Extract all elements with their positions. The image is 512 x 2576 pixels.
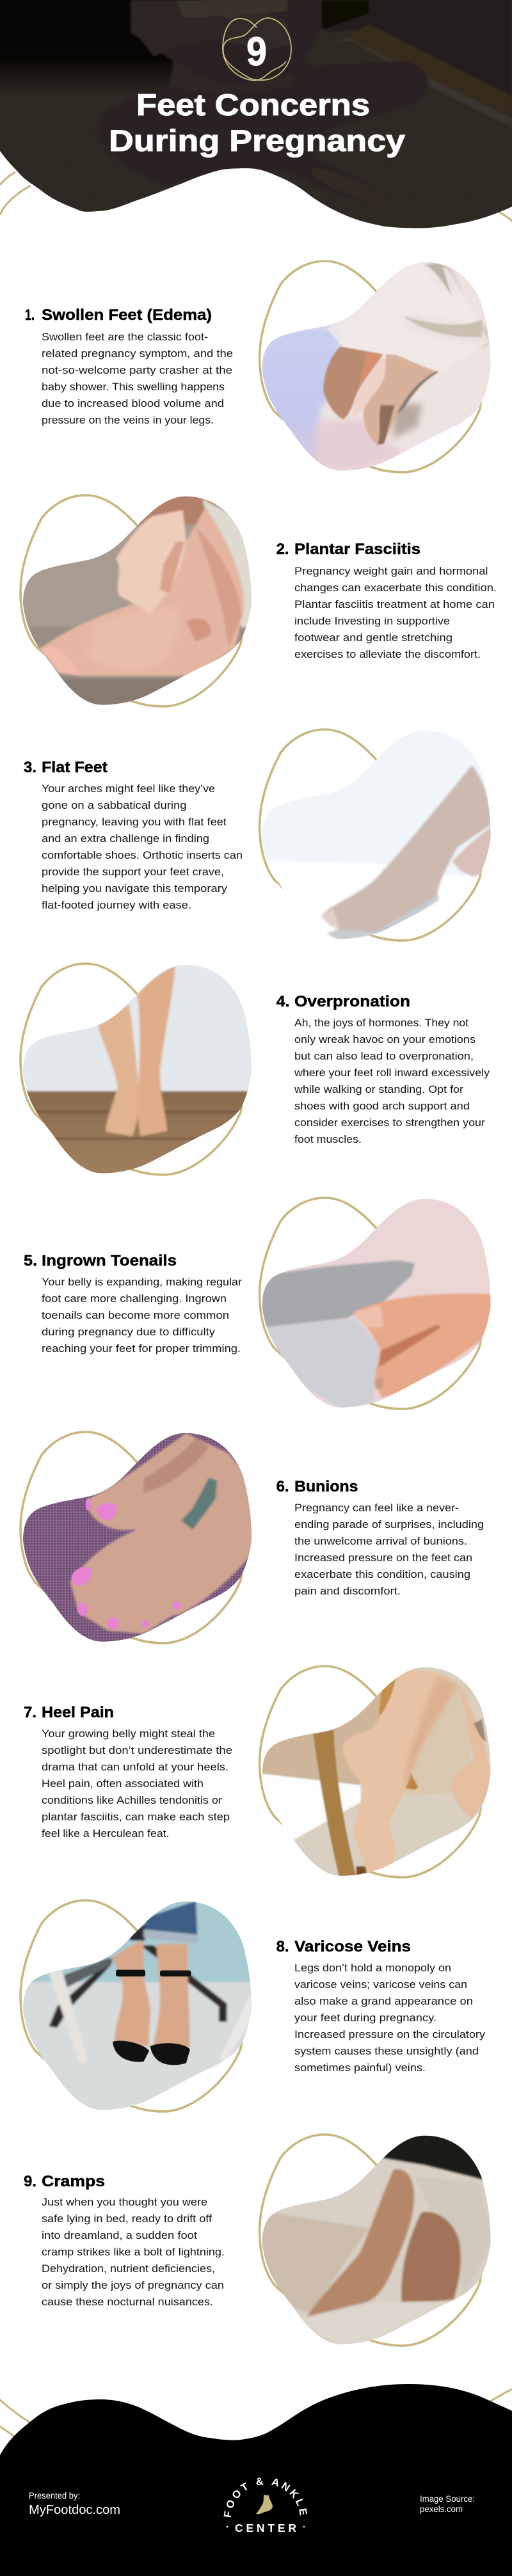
header decorative gold arcs [0, 172, 512, 222]
gold outline [260, 1666, 481, 1877]
body text: toenails can become more common [42, 1310, 229, 1321]
panel: 5 ingrown toenails [24, 1193, 497, 1419]
body text: into dreamland, a sudden foot [42, 2230, 197, 2241]
heading: Varicose Veins [294, 1938, 411, 1955]
heading: Ingrown Toenails [42, 1252, 177, 1269]
body text: Your growing belly might steal the [42, 1728, 215, 1740]
body text [42, 2197, 225, 2308]
gold outline [260, 2135, 481, 2346]
body text: conditions like Achilles tendonitis or [42, 1795, 223, 1806]
heading: 8. [276, 1938, 289, 1955]
body text: also make a grand appearance on [294, 1996, 473, 2007]
body text: reaching your feet for proper trimming. [42, 1343, 241, 1355]
body text: provide the support your feet crave, [42, 866, 224, 878]
footer black wave panel [0, 2384, 512, 2576]
gold outline [260, 729, 481, 941]
body text [294, 1962, 486, 2074]
heading: Flat Feet [42, 759, 108, 776]
body text [42, 331, 233, 426]
body text: sometimes painful) veins. [294, 2062, 426, 2074]
heading: Swollen Feet (Edema) [42, 306, 212, 324]
photo: feet in black sandals and jeans [23, 1902, 252, 2110]
photo: bare feet on bright white floor [262, 731, 491, 939]
header photo: seated pregnant woman on mat [0, 0, 512, 239]
body text: plantar fasciitis, can make each step [42, 1811, 230, 1823]
gold outline [20, 1432, 242, 1643]
body text: flat-footed journey with ease. [42, 900, 191, 911]
photo: raised heels beside wooden chair leg [256, 1664, 499, 1881]
photo: feet under rumpled sheets in bed [262, 2136, 491, 2344]
heading: 2. [276, 541, 289, 558]
footer: presented by: Presented by: [29, 2491, 80, 2500]
title [109, 88, 405, 157]
footer: image source: pexels.com [420, 2504, 463, 2514]
body text: your feet during pregnancy. [294, 2012, 436, 2024]
title: Feet Concerns [136, 88, 370, 122]
heading: Bunions [294, 1478, 358, 1495]
number badge: gold heart ring with 9: 9 [246, 29, 267, 74]
body text: where your feet roll inward excessively [294, 1067, 490, 1079]
heading: 4. [276, 993, 290, 1010]
body text: footwear and gentle stretching [294, 632, 452, 644]
body text: cause these nocturnal nuisances. [42, 2296, 213, 2308]
body text: system causes these unsightly (and [294, 2046, 479, 2057]
footer: presented by [29, 2491, 120, 2517]
body text: shoes with good arch support and [294, 1101, 470, 1112]
logo: foot and ankle center: FOOT & ANKLE [224, 2477, 307, 2517]
body text: consider exercises to strengthen your [294, 1117, 486, 1129]
body text: drama that can unfold at your heels. [42, 1761, 228, 1773]
icon: gold foot [256, 2495, 273, 2514]
photo: legs standing on wood floor [23, 965, 252, 1173]
body text: cramp strikes like a bolt of lightning. [42, 2246, 225, 2258]
body text: Pregnancy weight gain and hormonal [294, 566, 488, 577]
body text: the unwelcome arrival of bunions. [294, 1536, 467, 1547]
body text: baby shower. This swelling happens [42, 381, 225, 393]
body text: while walking or standing. Opt for [294, 1084, 464, 1095]
footer decorative gold arcs [0, 2389, 512, 2439]
body text: pregnancy, leaving you with flat feet [42, 816, 227, 828]
footer: image source [420, 2494, 475, 2514]
panel: 6 bunions [13, 1429, 484, 1649]
footer: presented by: MyFootdoc.com [29, 2503, 120, 2517]
heading: 9. [24, 2173, 36, 2190]
body text: Swollen feet are the classic foot- [42, 331, 208, 343]
panel: 4 overpronation [13, 958, 490, 1183]
body text: Legs don’t hold a monopoly on [294, 1962, 451, 1974]
body text: helping you navigate this temporary [42, 883, 228, 894]
body text: Your belly is expanding, making regular [42, 1276, 243, 1288]
body text: varicose veins; varicose veins can [294, 1979, 467, 1991]
photo: foot with pink nails on purple glitter [23, 1433, 252, 1642]
body text: ending parade of surprises, including [294, 1519, 484, 1530]
body text: not-so-welcome party crasher at the [42, 365, 232, 376]
body text: foot care more challenging. Ingrown [42, 1293, 227, 1305]
body text: related pregnancy symptom, and the [42, 348, 233, 360]
body text: and an extra challenge in finding [42, 833, 209, 845]
heading: 6. [276, 1478, 289, 1495]
panel: 3 flat feet [24, 722, 497, 949]
gold outline [260, 261, 481, 472]
body text: but can also lead to overpronation, [294, 1051, 474, 1062]
body text: Ah, the joys of hormones. They not [294, 1017, 468, 1029]
heading: Heel Pain [42, 1704, 114, 1721]
heading: Cramps [42, 2173, 105, 2190]
body text: exacerbate this condition, causing [294, 1569, 470, 1580]
body text: Increased pressure on the circulatory [294, 2029, 486, 2040]
body text [294, 566, 497, 660]
body text: foot muscles. [294, 1134, 362, 1145]
heading: Overpronation [294, 993, 410, 1010]
body text: comfortable shoes. Orthotic inserts can [42, 850, 243, 861]
panel: 1 swollen feet [25, 256, 499, 475]
gold outline [260, 1198, 481, 1409]
gold outline [20, 1900, 242, 2111]
body text: Dehydration, nutrient deficiencies, [42, 2263, 215, 2275]
body text [42, 1276, 243, 1355]
heading: 1. [25, 306, 35, 324]
body text [294, 1502, 484, 1597]
number badge: gold heart ring with 9 [223, 18, 291, 81]
body text: pain and discomfort. [294, 1586, 401, 1597]
body text: Increased pressure on the feet can [294, 1552, 472, 1564]
heading: Plantar Fasciitis [294, 541, 420, 558]
body text: safe lying in bed, ready to drift off [42, 2213, 212, 2225]
body text: Heel pain, often associated with [42, 1778, 204, 1790]
body text: gone on a sabbatical during [42, 800, 187, 811]
body text: feel like a Herculean feat. [42, 1828, 169, 1840]
logo: foot and ankle center: CENTER [235, 2522, 296, 2534]
body text: changes can exacerbate this condition. [294, 582, 497, 594]
body text: include Investing in supportive [294, 616, 450, 627]
body text: due to increased blood volume and [42, 398, 224, 409]
title: During Pregnancy [109, 123, 405, 157]
panel: 7 heel pain [24, 1664, 499, 1881]
gold outline [20, 495, 242, 706]
photo: feet on white and lavender bed sheets [262, 262, 490, 471]
panel: 8 varicose veins [13, 1896, 486, 2117]
heading: 7. [24, 1704, 36, 1721]
panel: 2 plantar fasciitis [13, 493, 497, 710]
body text [42, 1728, 232, 1840]
body text: during pregnancy due to difficulty [42, 1326, 216, 1338]
heading: 3. [24, 759, 36, 776]
footer: image source: Image Source: [420, 2494, 475, 2504]
body text: exercises to alleviate the discomfort. [294, 649, 481, 660]
body text [294, 1017, 490, 1145]
photo: hand touching swollen ankle [23, 497, 252, 705]
body text [42, 783, 243, 911]
body text: pressure on the veins in your legs. [42, 415, 214, 426]
panel: 9 cramps [24, 2128, 497, 2351]
heading: 5. [24, 1252, 37, 1269]
body text: only wreak havoc on your emotions [294, 1034, 476, 1046]
body text: Pregnancy can feel like a never- [294, 1502, 459, 1514]
body text: spotlight but don’t underestimate the [42, 1745, 232, 1756]
photo: gloved hands treating toe [262, 1199, 491, 1408]
logo: foot and ankle center [224, 2477, 307, 2534]
body text: Your arches might feel like they’ve [42, 783, 215, 795]
body text: Just when you thought you were [42, 2197, 207, 2208]
body text: or simply the joys of pregnancy can [42, 2280, 224, 2291]
gold outline [20, 964, 242, 1175]
body text: Plantar fasciitis treatment at home can [294, 599, 495, 610]
